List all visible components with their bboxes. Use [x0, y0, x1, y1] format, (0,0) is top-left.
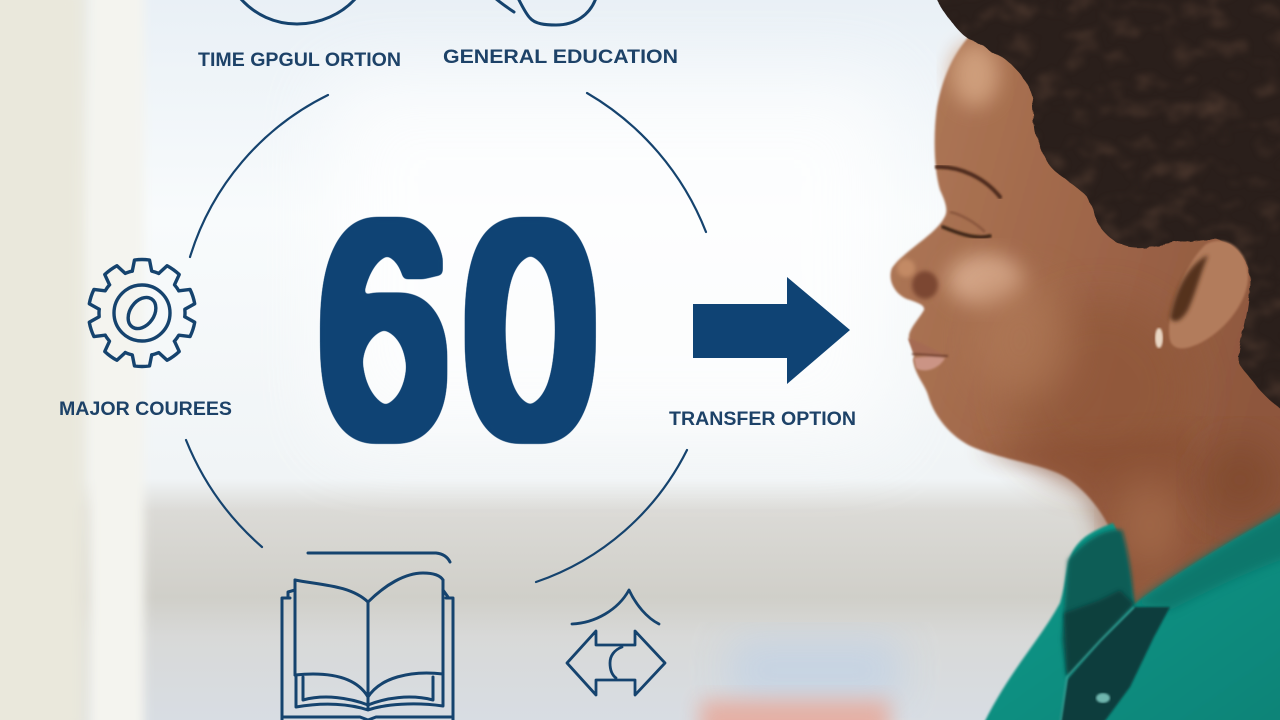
closed eye: [943, 212, 990, 237]
shirt placket dark: [1060, 607, 1170, 720]
skin: face and neck: [891, 30, 1280, 620]
shirt button: [1096, 693, 1110, 703]
shirt collar band shading: [1134, 505, 1280, 610]
earring: [1155, 328, 1163, 348]
lower collar shadow: [1064, 590, 1134, 677]
person: profile portrait: [891, 0, 1280, 720]
face shading: [947, 43, 1280, 590]
label: major courses: MAJOR COUREES: [59, 399, 232, 420]
hair: [932, 0, 1280, 418]
arrow to transfer option: [693, 277, 850, 384]
label: general education: GENERAL EDUCATION: [443, 47, 678, 68]
left collar flap dark: [1062, 530, 1134, 677]
nose shading: [912, 271, 938, 299]
big number 60: 60: [318, 163, 595, 497]
mouth: [908, 338, 948, 370]
icon: general education (cropped at top): [495, 0, 596, 25]
ear: [1169, 241, 1248, 348]
ear inner shadow: [1170, 255, 1208, 321]
eyebrow: [937, 167, 1000, 197]
label: time: TIME GPGUL ORTION: [198, 50, 401, 71]
icon: open book: [282, 553, 453, 720]
ring: arc segments around the number: [186, 93, 706, 582]
icon: gear: [86, 260, 198, 366]
icon: transfer double arrow: [567, 590, 665, 695]
shirt: [983, 505, 1280, 720]
placket edge piping: [1060, 607, 1134, 720]
icon: time circle (cropped at top): [240, 0, 356, 24]
nose highlight: [897, 259, 915, 277]
label: transfer option: TRANSFER OPTION: [669, 409, 856, 430]
